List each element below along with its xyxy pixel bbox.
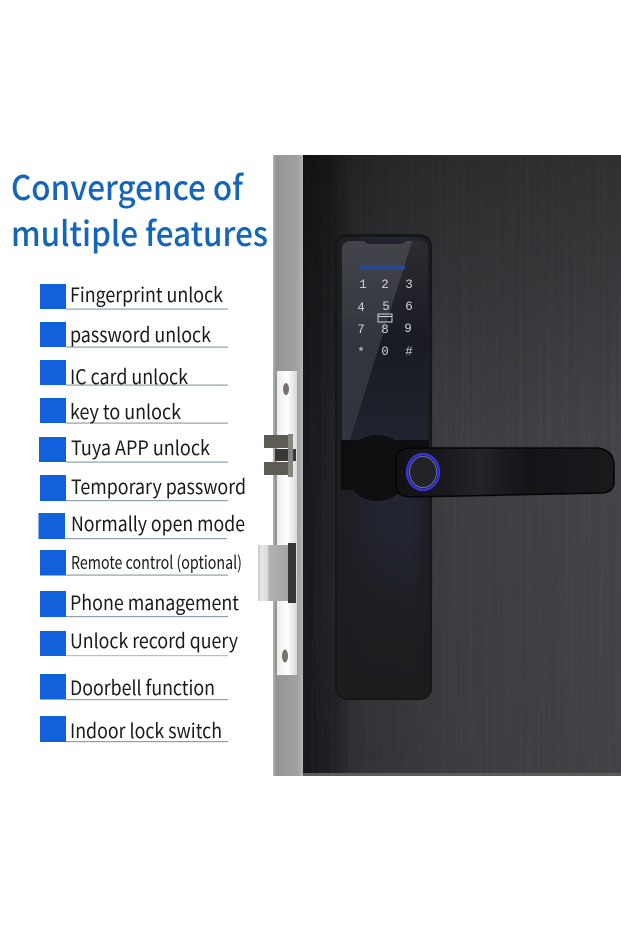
feature: IC card unlock: IC card unlock: [70, 361, 188, 390]
mortise lock: [258, 371, 297, 675]
feature: unlock record query: Unlock record query: [70, 625, 239, 654]
glass keypad area: [342, 241, 428, 440]
feature list: [38, 279, 246, 744]
glass reflection: [342, 241, 412, 440]
keypad digits: 3: [405, 278, 413, 292]
feature: doorbell function: Doorbell function: [70, 672, 215, 701]
latch: [264, 434, 296, 477]
feature: normally open mode: Normally open mode: [71, 508, 245, 537]
keypad digits: 5: [382, 300, 390, 314]
keypad digits: 4: [357, 301, 365, 315]
top screw: [283, 383, 289, 395]
back panel: [335, 234, 432, 700]
blue display bar: [360, 265, 405, 270]
keypad digits: 7: [357, 323, 365, 337]
feature: key to unlock: [40, 396, 228, 425]
keypad digits: [357, 278, 413, 360]
door face: [303, 155, 621, 776]
keypad digits: *: [357, 346, 365, 360]
feature: IC card unlock: [40, 360, 228, 390]
face plate: [277, 371, 297, 675]
keypad digits: 8: [381, 323, 389, 337]
bottom screw: [282, 650, 288, 662]
feature: Tuya APP unlock: Tuya APP unlock: [71, 432, 210, 461]
card icon: [378, 314, 392, 322]
keypad digits: #: [405, 345, 413, 359]
feature: indoor lock switch: Indoor lock switch: [70, 715, 222, 744]
dark band under glass: [341, 440, 429, 449]
feature: remote control: Remote control (optional): [71, 549, 242, 575]
feature: key to unlock: key to unlock: [70, 396, 181, 425]
feature: temporary password: Temporary password: [71, 471, 246, 500]
lever handle: [396, 448, 614, 497]
dead bolt: [258, 543, 296, 603]
handle rose: [344, 435, 410, 501]
door edge: [273, 155, 303, 776]
keypad digits: 6: [405, 300, 413, 314]
feature: phone management: Phone management: [70, 587, 239, 616]
fingerprint sensor: [407, 454, 439, 490]
door: [273, 155, 621, 776]
title: Convergence of: [11, 161, 244, 210]
feature: remote control: [40, 549, 242, 576]
keypad digits: 1: [359, 278, 367, 292]
keypad digits: 0: [381, 345, 389, 359]
keypad digits: 2: [381, 278, 389, 292]
title: [11, 161, 268, 256]
lock body: [335, 234, 614, 700]
keypad digits: 9: [404, 322, 412, 336]
feature: fingerprint unlock: Fingerprint unlock: [70, 279, 223, 308]
title: multiple features: [11, 207, 268, 256]
feature: password unlock: password unlock: [70, 319, 211, 348]
